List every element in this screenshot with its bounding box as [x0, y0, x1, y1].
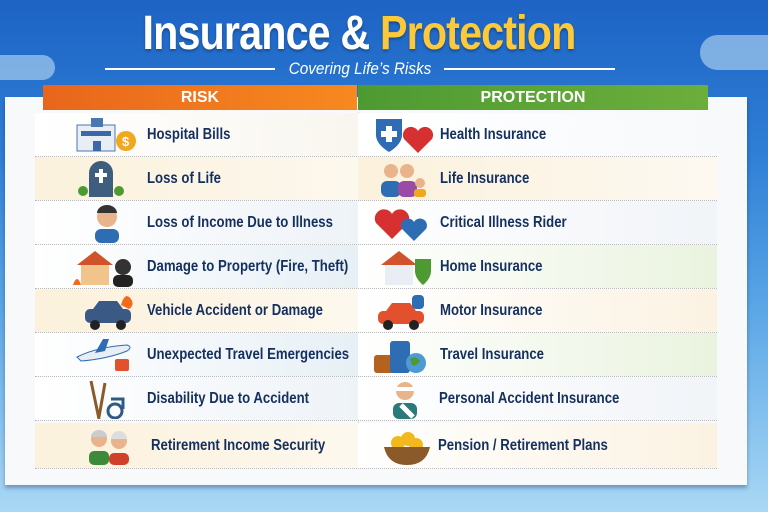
row 2 [35, 157, 717, 201]
header: risk [43, 85, 357, 110]
row 1: Health Insurance [440, 126, 546, 143]
title: Insurance & Protection [143, 7, 575, 60]
row 6: Travel Insurance [440, 346, 544, 363]
icon: hospital [76, 118, 136, 152]
icon: plane [76, 339, 130, 371]
icon: car fire [85, 296, 133, 330]
row 6 [35, 333, 717, 377]
icon: crutches wheelchair [90, 380, 124, 419]
row 5 [35, 289, 717, 333]
row 7: Disability Due to Accident [147, 390, 309, 407]
row 2: Loss of Life [147, 170, 221, 187]
row 3 [35, 201, 717, 245]
row 3: Loss of Income Due to Illness [147, 214, 333, 231]
header: risk: RISK [181, 89, 219, 106]
row 4: Damage to Property (Fire, Theft) [147, 258, 348, 275]
icon: hospital: $ [122, 134, 130, 149]
icon: tombstone [78, 161, 124, 197]
row 6: Unexpected Travel Emergencies [147, 346, 349, 363]
row 4: Home Insurance [440, 258, 543, 275]
icon: sick person [95, 205, 119, 243]
row 5: Vehicle Accident or Damage [147, 302, 323, 319]
row 7: Personal Accident Insurance [439, 390, 619, 407]
row 8: Retirement Income Security [151, 437, 325, 454]
icon: luggage globe [374, 341, 426, 373]
row 4 [35, 245, 717, 289]
header: protection: PROTECTION [481, 89, 585, 106]
icon: nest eggs [384, 432, 430, 465]
icon: car [378, 295, 424, 330]
icon: injured person [393, 382, 417, 419]
row 1 [35, 113, 717, 157]
row 8: Pension / Retirement Plans [438, 437, 608, 454]
icon: shield heart [376, 119, 434, 153]
icon: hearts [374, 209, 427, 241]
icon: house shield [381, 251, 431, 285]
cloud right [700, 35, 768, 70]
row 5: Motor Insurance [440, 302, 542, 319]
icon: elderly couple [89, 430, 129, 465]
row 2: Life Insurance [440, 170, 529, 187]
row 3: Critical Illness Rider [440, 214, 567, 231]
header: protection [358, 85, 708, 110]
row 7 [35, 377, 717, 421]
cloud left [0, 55, 55, 80]
panel: table [5, 97, 747, 485]
row 1: Hospital Bills [147, 126, 230, 143]
subtitle: Covering Life’s Risks [289, 59, 431, 78]
row 8 [35, 423, 717, 469]
icon: family [381, 164, 426, 197]
icon: house thief [73, 251, 133, 287]
